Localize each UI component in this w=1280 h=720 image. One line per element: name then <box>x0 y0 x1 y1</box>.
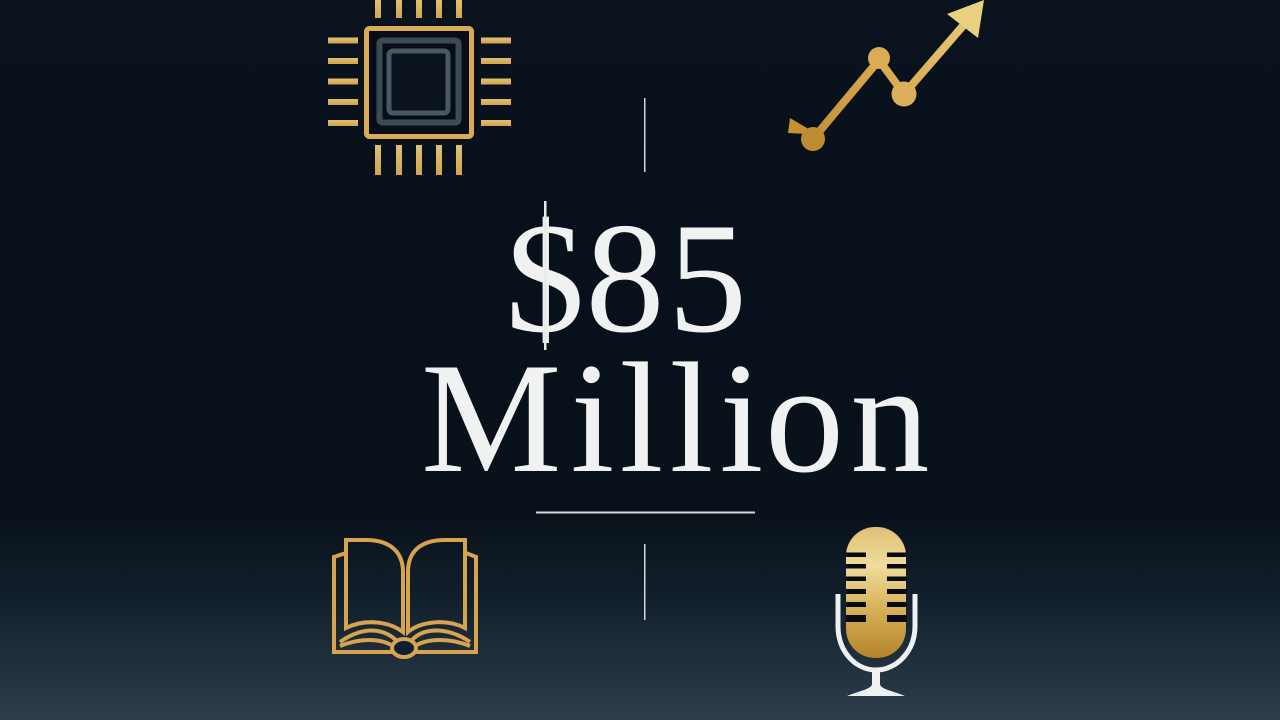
right page <box>408 540 465 632</box>
arrow line <box>813 20 968 139</box>
arrow data points <box>801 47 916 151</box>
mic cradle <box>838 594 915 670</box>
bottom vertical divider <box>644 544 646 620</box>
chip frame <box>366 28 472 136</box>
book spine <box>392 639 416 657</box>
mic capsule <box>846 527 906 658</box>
chip core <box>380 40 458 122</box>
icon: open book <box>334 540 476 657</box>
arrow tail <box>788 118 808 134</box>
icon: rising arrow chart <box>788 0 984 151</box>
title: $85 Million <box>421 191 930 506</box>
arrowhead <box>947 0 984 38</box>
amount: $85 <box>506 191 747 366</box>
page edges <box>340 630 470 646</box>
book cover <box>334 553 476 652</box>
mic stand <box>847 670 905 696</box>
word: Million: Million <box>421 331 930 506</box>
mic grille <box>846 552 907 622</box>
dollar sign stroke <box>544 201 546 350</box>
left page <box>346 540 403 632</box>
icon: microchip <box>328 0 511 175</box>
top vertical divider <box>644 98 646 172</box>
chip pins <box>328 0 511 175</box>
horizontal divider <box>536 512 755 514</box>
icon: microphone <box>838 527 915 696</box>
